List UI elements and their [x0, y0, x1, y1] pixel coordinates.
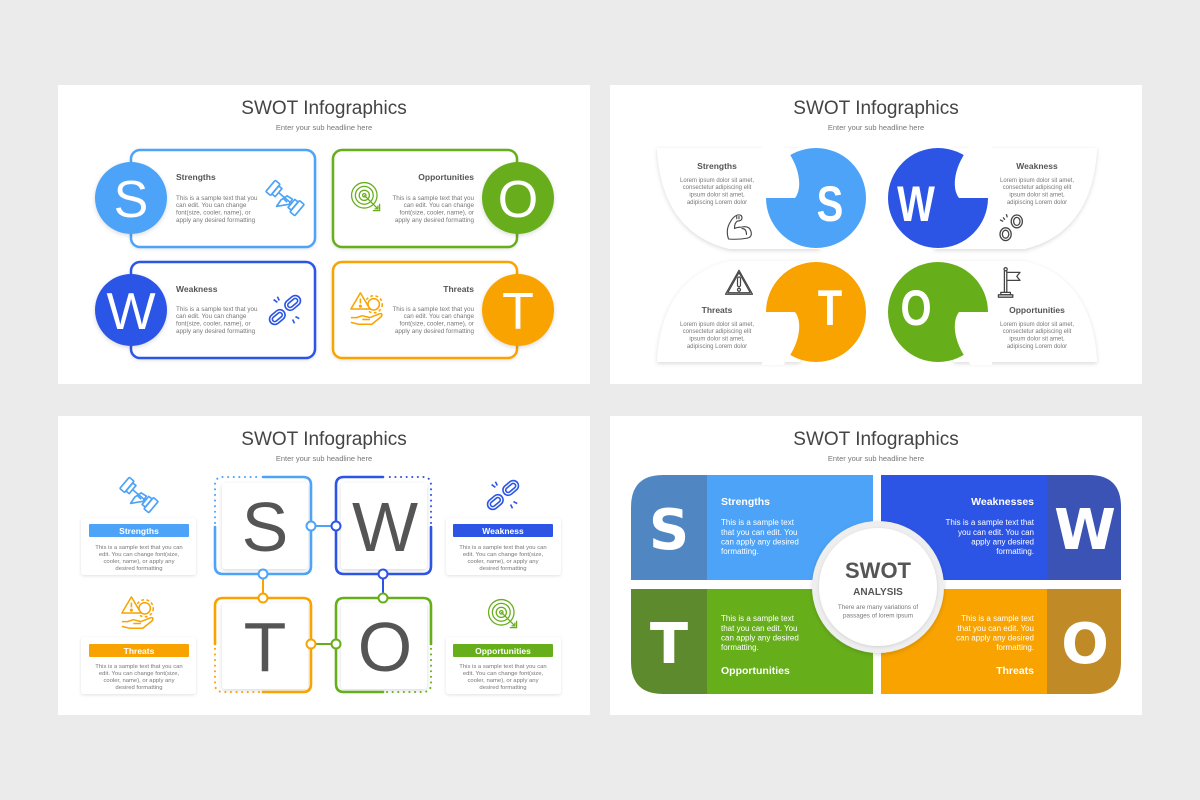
quadrant: opportunities	[888, 261, 1097, 365]
card: strengths: font(size, cooler, name), or	[176, 210, 251, 216]
block: weaknesses: W	[1054, 498, 1116, 563]
center circle: SWOT analysis: There are many variations of	[838, 604, 918, 611]
block: weaknesses: Weaknesses	[971, 496, 1034, 508]
center circle: SWOT analysis	[812, 521, 944, 653]
center circle: SWOT analysis: SWOT	[845, 558, 912, 583]
card: threats: font(size, cooler, name), or	[399, 320, 474, 328]
card: strengths: desired formatting	[115, 566, 163, 572]
tile grid: O	[358, 608, 412, 686]
block: opportunities: that you can edit. You	[721, 624, 798, 633]
quadrant: threats: T	[818, 280, 843, 336]
quadrant: threats: adipiscing Lorem dolor	[687, 344, 747, 350]
quadrant: weakness	[888, 145, 1097, 249]
quadrant: opportunities: ipsum dolor sit amet,	[1009, 336, 1065, 342]
card: weakness: font(size, cooler, name), or	[176, 320, 251, 328]
block: opportunities: This is a sample text	[721, 614, 795, 623]
quadrant: weakness: consectetur adipiscing elit	[1003, 185, 1072, 191]
card: weakness: desired formatting	[479, 566, 527, 572]
card: opportunities: O	[498, 171, 538, 229]
subtitle: Enter your sub headline here	[276, 454, 372, 463]
quadrant: threats: ipsum dolor sit amet,	[689, 336, 745, 342]
tile grid: S	[242, 488, 288, 566]
quadrant: threats: Threats	[702, 305, 733, 315]
block: threats: that you can edit. You	[957, 624, 1034, 633]
card: threats	[333, 262, 554, 358]
card: opportunities: edit. You can change font(size,	[463, 671, 543, 677]
quadrant: opportunities: adipiscing Lorem dolor	[1007, 344, 1067, 350]
block: strengths: formatting.	[721, 547, 759, 556]
block: threats: can apply any desired	[956, 634, 1034, 642]
block: strengths: S	[649, 498, 689, 563]
card: strengths: Strengths	[176, 172, 216, 182]
block: threats: formatting.	[996, 643, 1034, 652]
quadrant: strengths: Strengths	[697, 161, 737, 171]
quadrant: weakness: Weakness	[1016, 161, 1058, 171]
quadrant: weakness: ipsum dolor sit amet,	[1009, 192, 1065, 198]
quadrant: threats: Lorem ipsum dolor sit amet,	[680, 322, 754, 328]
subtitle: Enter your sub headline here	[828, 123, 924, 132]
block: strengths: that you can edit. You	[721, 528, 798, 537]
card: opportunities	[446, 600, 561, 694]
card: opportunities: Opportunities	[475, 646, 531, 656]
card: threats: desired formatting	[115, 685, 163, 691]
block: threats: O	[1061, 612, 1109, 677]
card: threats: can edit. You can change	[404, 313, 474, 320]
quadrant: strengths: S	[817, 176, 843, 232]
card: opportunities: apply any desired formatting	[395, 217, 474, 224]
card: threats: edit. You can change font(size,	[99, 671, 179, 677]
card: threats	[81, 597, 196, 694]
card: weakness: can edit. You can change	[176, 313, 247, 320]
quadrant: weakness: W	[897, 176, 935, 232]
quadrant: threats: consectetur adipiscing elit	[683, 329, 752, 335]
title: SWOT Infographics	[793, 98, 959, 119]
card: opportunities: This is a sample text that you	[392, 195, 474, 202]
block: strengths: Strengths	[721, 496, 770, 508]
card: weakness	[446, 478, 561, 575]
slide 1: rounded cards SWOT	[58, 85, 590, 384]
card: weakness: edit. You can change font(size,	[463, 552, 543, 558]
card: weakness: This is a sample text that you can	[459, 545, 547, 551]
card: strengths: cooler, name), or apply any	[103, 559, 175, 565]
block: strengths: This is a sample text	[721, 518, 795, 527]
title: SWOT Infographics	[241, 98, 407, 119]
quadrant: opportunities: O	[900, 280, 932, 336]
block: threats: This is a sample text	[961, 614, 1035, 623]
quadrant: opportunities: Lorem ipsum dolor sit amet,	[1000, 322, 1074, 328]
card: strengths: This is a sample text that you can	[95, 545, 183, 551]
card: strengths: S	[114, 171, 148, 229]
block: threats	[881, 589, 1121, 694]
block: weaknesses: formatting.	[996, 547, 1034, 556]
tile grid: W	[352, 488, 418, 566]
block: weaknesses: This is a sample text that	[946, 518, 1035, 527]
quadrant: weakness: Lorem ipsum dolor sit amet,	[1000, 178, 1074, 184]
block: strengths	[631, 475, 873, 580]
block: strengths: can apply any desired	[721, 538, 799, 546]
block: opportunities	[631, 589, 873, 694]
quadrant: strengths: consectetur adipiscing elit	[683, 185, 752, 191]
card: threats: This is a sample text that you	[392, 306, 474, 313]
card: threats: Threats	[124, 646, 155, 656]
quadrant: strengths: Lorem ipsum dolor sit amet,	[680, 178, 754, 184]
card: threats: Threats	[443, 284, 474, 294]
card: strengths: This is a sample text that you	[176, 195, 258, 202]
subtitle: Enter your sub headline here	[276, 123, 372, 132]
quadrant: threats	[657, 261, 866, 365]
block: weaknesses: you can edit. You can	[958, 528, 1034, 537]
quadrant: opportunities: consectetur adipiscing elit	[1003, 329, 1072, 335]
card: strengths: Strengths	[119, 526, 159, 536]
card: strengths: edit. You can change font(size,	[99, 552, 179, 558]
card: strengths: can edit. You can change	[176, 202, 247, 209]
card: threats: T	[502, 283, 534, 341]
card: threats: cooler, name), or apply any	[103, 678, 175, 684]
slide 2: leaf and circle SWOT	[610, 85, 1142, 384]
card: weakness: W	[106, 283, 156, 341]
card: opportunities: font(size, cooler, name), or	[399, 210, 474, 216]
card: opportunities	[333, 150, 554, 247]
center circle: SWOT analysis: passages of lorem ipsum	[843, 612, 913, 620]
card: weakness: apply any desired formatting	[176, 328, 256, 335]
subtitle: Enter your sub headline here	[828, 454, 924, 463]
block: opportunities: T	[650, 612, 688, 677]
quadrant: strengths	[657, 145, 866, 249]
card: opportunities: Opportunities	[418, 172, 474, 182]
card: weakness: Weakness	[176, 284, 218, 294]
quadrant: strengths: ipsum dolor sit amet,	[689, 192, 745, 198]
title: SWOT Infographics	[241, 429, 407, 450]
block: opportunities: can apply any desired	[721, 634, 799, 642]
tile grid	[215, 477, 431, 692]
card: strengths	[81, 477, 196, 575]
card: opportunities: cooler, name), or apply any	[467, 678, 539, 684]
card: opportunities: can edit. You can change	[404, 202, 474, 209]
card: strengths: apply any desired formatting	[176, 217, 256, 224]
card: weakness	[95, 262, 315, 358]
tile grid: T	[244, 608, 286, 686]
card: weakness: cooler, name), or apply any	[467, 559, 539, 565]
block: threats: Threats	[996, 665, 1034, 677]
title: SWOT Infographics	[793, 429, 959, 450]
slide 3: square tiles SWOT	[58, 416, 590, 715]
card: opportunities: This is a sample text that you can	[459, 664, 547, 670]
block: opportunities: formatting.	[721, 643, 759, 652]
card: weakness: Weakness	[482, 526, 524, 536]
card: strengths	[95, 150, 315, 247]
card: weakness: This is a sample text that you	[176, 306, 258, 313]
slide 4: block SWOT analysis	[610, 416, 1142, 715]
center circle: SWOT analysis: ANALYSIS	[853, 587, 903, 598]
quadrant: strengths: adipiscing Lorem dolor	[687, 200, 747, 206]
card: opportunities: desired formatting	[479, 685, 527, 691]
block: opportunities: Opportunities	[721, 665, 790, 677]
card: threats: This is a sample text that you can	[95, 664, 183, 670]
quadrant: weakness: adipiscing Lorem dolor	[1007, 200, 1067, 206]
block: weaknesses: apply any desired	[971, 538, 1034, 546]
block: weaknesses	[881, 475, 1121, 580]
quadrant: opportunities: Opportunities	[1009, 305, 1065, 315]
card: threats: apply any desired formatting	[395, 328, 474, 335]
